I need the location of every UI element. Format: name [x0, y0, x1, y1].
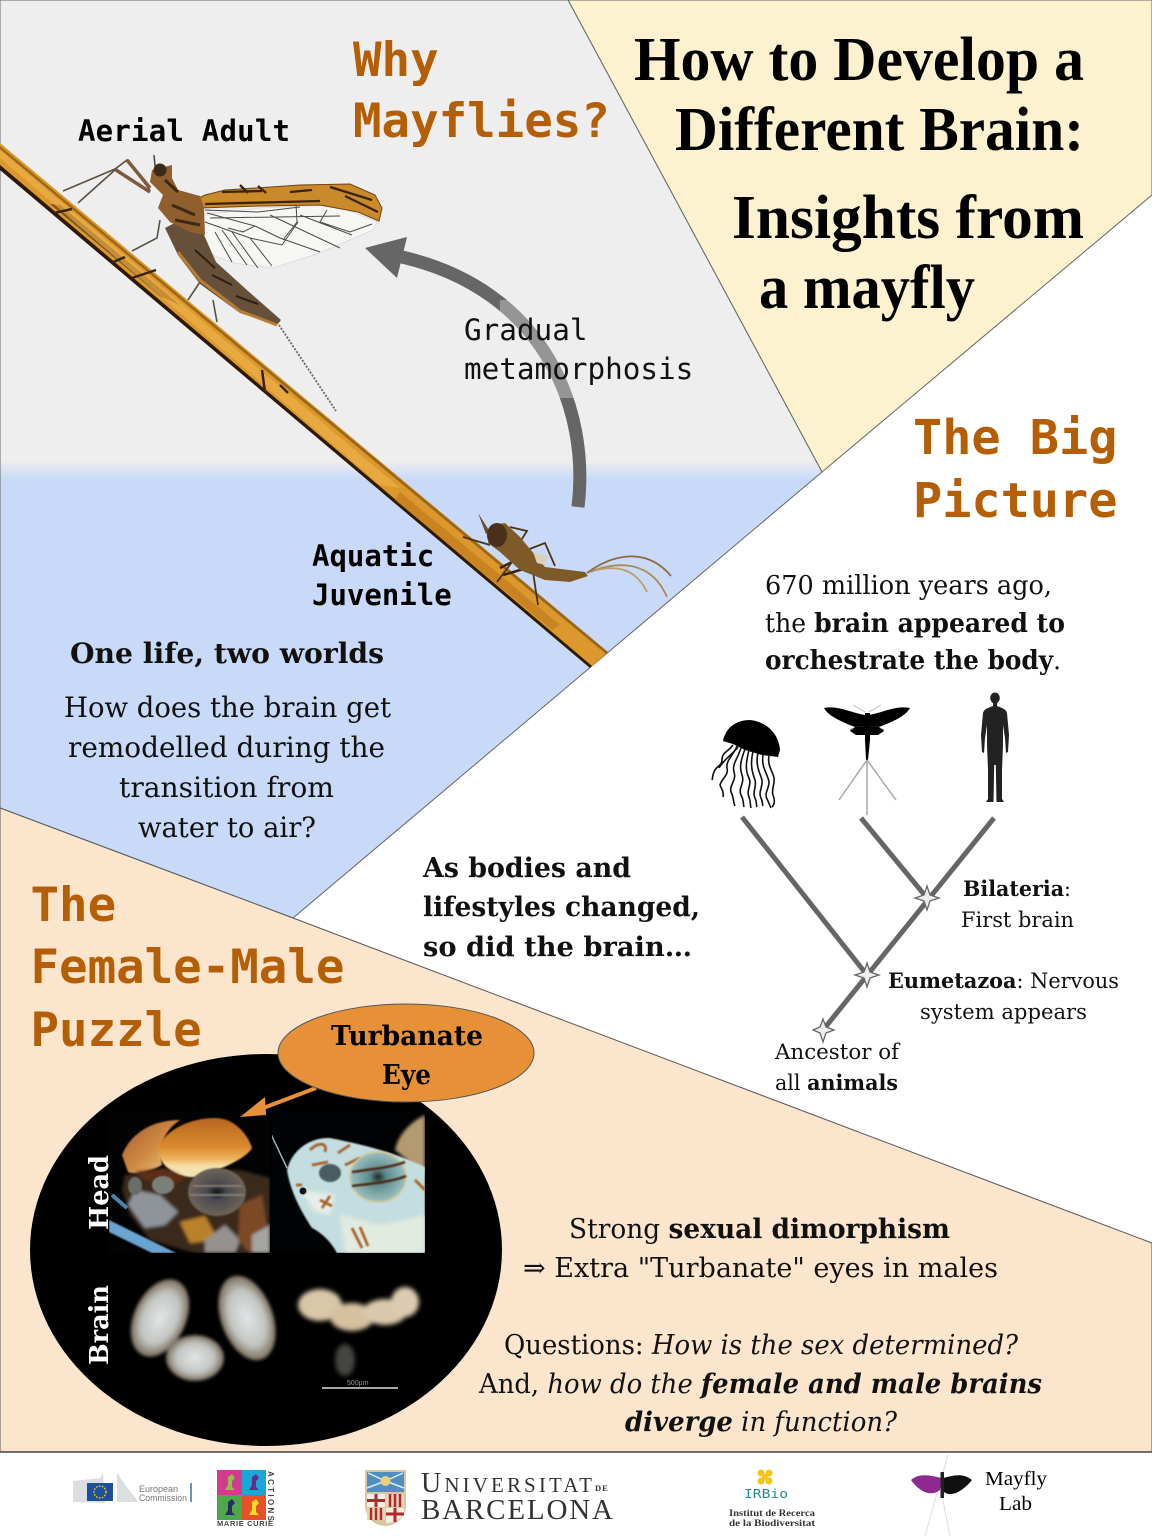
- right ocelli: [319, 1164, 341, 1182]
- logo: Marie Curie Actions: ACTIONS: [266, 1471, 275, 1522]
- lower head and thorax tissue: [122, 1170, 270, 1253]
- icon: mayfly silhouette: [824, 705, 910, 815]
- logo: Universitat de Barcelona: [365, 1468, 613, 1526]
- label: aquatic juvenile: Juvenile: [312, 578, 452, 612]
- photo: male brain: [298, 1287, 419, 1376]
- label: aquatic juvenile: Aquatic: [312, 539, 434, 573]
- logo: Universitat de Barcelona: DE: [595, 1483, 609, 1493]
- logo: IRBio: de la Biodiversitat: [729, 1518, 815, 1528]
- text: as bodies and lifestyles changed: so did the brain…: [423, 932, 692, 963]
- logo: European Commission: [73, 1472, 191, 1503]
- label: eumetazoa: [888, 968, 1119, 1024]
- footer: white logo strip: [0, 1452, 1152, 1536]
- adult abdomen: [165, 210, 281, 325]
- text: questions: [478, 1330, 1042, 1438]
- panel: title background: [568, 0, 1152, 472]
- text: 670 million years ago: orchestrate the body.: [765, 646, 1061, 676]
- illustration: aerial adult mayfly: [63, 155, 382, 411]
- logo: Universitat de Barcelona: UNIVERSITAT: [421, 1468, 592, 1499]
- heading: the big picture: Picture: [913, 473, 1117, 529]
- callout arrow: turbanate eye: [240, 1088, 316, 1117]
- adult thorax and head: [150, 165, 205, 235]
- text: as bodies and lifestyles changed: lifestyles changed,: [423, 892, 700, 923]
- illustration: branch: [0, 143, 608, 668]
- logo: Marie Curie Actions: [217, 1470, 275, 1528]
- logo: European Commission: European: [139, 1484, 178, 1494]
- text: questions: Questions: How is the sex determined?: [504, 1330, 1019, 1361]
- right compound eye: [350, 1152, 406, 1202]
- text: sexual dimorphism: [523, 1214, 998, 1284]
- text: one life two worlds: One life, two worlds: [70, 637, 384, 670]
- panel: black photo ellipse: [30, 1054, 502, 1446]
- callout: turbanate eye: Eye: [382, 1060, 431, 1091]
- text: brain remodelling question: water to air?: [138, 811, 316, 844]
- label: aerial adult: Aerial Adult: [78, 114, 290, 148]
- heading: why mayflies: Mayflies?: [353, 94, 610, 149]
- panel: female-male puzzle background: [0, 808, 1152, 1452]
- rear turbanate lobe: [122, 1120, 180, 1173]
- illustration: aquatic juvenile nymph: [463, 513, 671, 605]
- text: 670 million years ago: the brain appeared to: [765, 609, 1065, 639]
- logo: IRBio: IRBio: [744, 1487, 788, 1501]
- label: ancestor of all animals: [774, 1040, 901, 1095]
- adult legs: [63, 160, 217, 322]
- title: Different Brain:: [675, 96, 1084, 164]
- label: eumetazoa: system appears: [920, 1000, 1087, 1024]
- label: brain: Brain: [85, 1285, 115, 1365]
- heading: the female-male puzzle: The: [30, 878, 116, 933]
- logo: European Commission: Commission: [139, 1493, 187, 1503]
- node star: ancestor: [813, 1019, 834, 1042]
- logo: Mayfly Lab: [911, 1455, 1047, 1536]
- adult hind wing: [200, 204, 377, 268]
- node star: bilateria: [915, 886, 939, 910]
- logo: Universitat de Barcelona: BARCELONA: [421, 1494, 613, 1526]
- logo: Mayfly Lab: Lab: [999, 1493, 1032, 1515]
- label: bilateria: Bilateria:: [963, 876, 1071, 901]
- adult fore wing: [178, 184, 382, 221]
- title: a mayfly: [759, 254, 975, 322]
- text: as bodies and lifestyles changed: As bodies and: [422, 853, 631, 884]
- callout: turbanate eye: [278, 1004, 534, 1102]
- icon: jellyfish: [712, 720, 780, 808]
- photo: female head without turbanate eye: [270, 1111, 425, 1253]
- text: as bodies and lifestyles changed: [422, 853, 700, 963]
- callout: turbanate eye: Turbanate: [331, 1021, 483, 1052]
- label: gradual metamorphosis: Gradual: [464, 313, 587, 347]
- label: head: Head: [85, 1155, 115, 1230]
- text: 670 million years ago: [765, 571, 1065, 676]
- text: questions: diverge in function?: [625, 1407, 897, 1438]
- title: How to Develop a: [634, 26, 1084, 94]
- logo: Mayfly Lab: Mayfly: [985, 1468, 1047, 1490]
- chart: phylogenetic tree: [742, 817, 994, 1042]
- text: sexual dimorphism: ⇒ Extra "Turbanate" eyes in males: [523, 1253, 998, 1284]
- adult tail: [279, 325, 336, 411]
- heading: the female-male puzzle: Female-Male: [30, 940, 344, 995]
- label: ancestor of all animals: Ancestor of: [774, 1040, 901, 1064]
- arrow: gradual metamorphosis: [365, 237, 600, 507]
- logo: IRBio: Institut de Recerca: [729, 1508, 816, 1518]
- heading: why mayflies: Why: [353, 33, 439, 88]
- text: brain remodelling question: How does the brain get: [64, 691, 392, 724]
- icon: human silhouette: [981, 692, 1009, 802]
- pale head tissue: [287, 1138, 425, 1253]
- photo: female brain: [119, 1268, 286, 1381]
- front turbanate lobe: [158, 1118, 252, 1177]
- node star: eumetazoa: [855, 963, 879, 987]
- text: brain remodelling question: remodelled during the: [68, 731, 385, 764]
- text: 670 million years ago: 670 million years ago,: [765, 571, 1052, 601]
- label: bilateria: First brain: [961, 908, 1074, 932]
- ocelli: [152, 1176, 174, 1194]
- text: questions: And, how do the female and male brains: [478, 1369, 1042, 1400]
- photo: female head with turbanate eye: [109, 1111, 270, 1253]
- label: bilateria: [961, 876, 1074, 932]
- label: gradual metamorphosis: metamorphosis: [464, 352, 693, 386]
- nymph tail filaments: [587, 556, 671, 597]
- label: ancestor of all animals: all animals: [775, 1070, 898, 1095]
- label: eumetazoa: Eumetazoa: Nervous: [888, 968, 1119, 993]
- text: brain remodelling question: [64, 691, 392, 844]
- scale bar: [322, 1380, 398, 1388]
- heading: the female-male puzzle: Puzzle: [30, 1003, 202, 1058]
- logo: IRBio: [729, 1470, 816, 1528]
- panel: why mayflies air and water background: [0, 0, 822, 918]
- text: sexual dimorphism: Strong sexual dimorphism: [569, 1214, 950, 1245]
- scale bar: 500µm: [347, 1380, 369, 1387]
- heading: the big picture: The Big: [913, 410, 1117, 466]
- title: [634, 26, 1084, 322]
- compound eye: [188, 1168, 246, 1216]
- text: brain remodelling question: transition from: [119, 771, 334, 804]
- title: Insights from: [732, 184, 1084, 252]
- logo: Marie Curie Actions: MARIE CURIE: [217, 1519, 273, 1528]
